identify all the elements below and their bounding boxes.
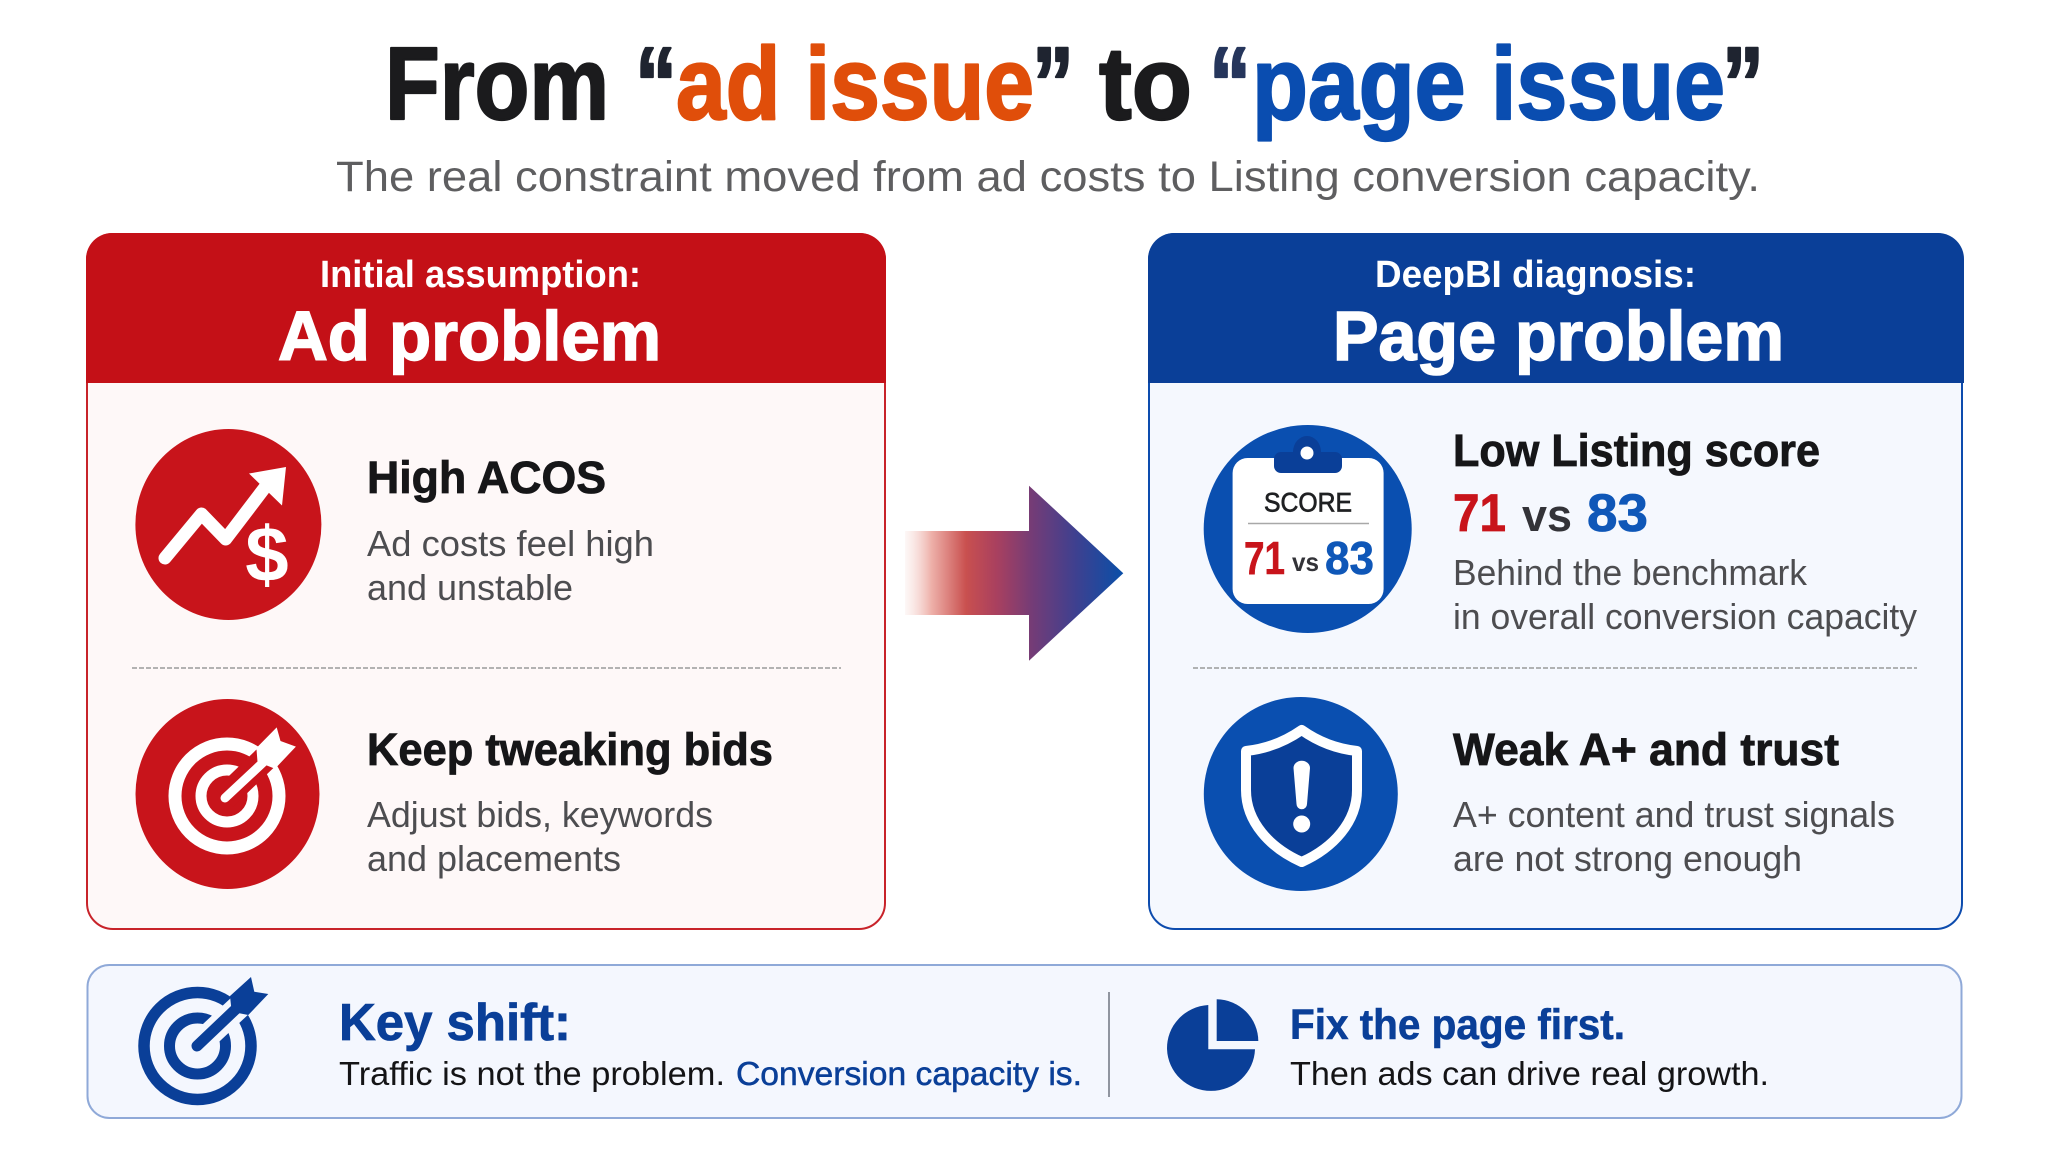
item: weak A+ and trust	[1453, 724, 1895, 879]
item: low listing score: in overall conversion capacity	[1453, 596, 1917, 637]
item: keep tweaking bids: and placements	[367, 838, 621, 879]
item: high ACOS: Ad costs feel high	[367, 523, 654, 564]
panel header: ad problem: Ad problem	[278, 297, 661, 375]
panel header: page problem: DeepBI diagnosis:	[1375, 254, 1696, 296]
icon: score clipboard: SCORE	[1264, 488, 1352, 518]
item: weak A+ and trust: A+ content and trust signals	[1453, 794, 1895, 835]
title: ad issue	[676, 26, 1034, 141]
item: high ACOS: High ACOS	[367, 452, 606, 503]
fix the page first text: Fix the page first.	[1290, 1001, 1625, 1049]
item: high ACOS: and unstable	[367, 567, 573, 608]
icon: rising cost chart with dollar	[135, 429, 321, 620]
key shift text: Key shift:	[339, 994, 571, 1052]
item: weak A+ and trust: are not strong enough	[1453, 838, 1802, 879]
icon: pie chart	[1167, 999, 1258, 1091]
arrow: from ad problem to page problem	[905, 486, 1123, 661]
panel header: ad problem: Initial assumption:	[320, 254, 641, 296]
key shift text: Traffic is not the problem.	[339, 1055, 725, 1092]
title: From	[385, 26, 609, 141]
item: weak A+ and trust: Weak A+ and trust	[1453, 724, 1839, 775]
key shift text: Conversion capacity is.	[736, 1055, 1082, 1092]
item: low listing score: vs	[1522, 490, 1572, 541]
title: “	[635, 26, 677, 141]
item: low listing score: 71	[1453, 484, 1506, 543]
item: high ACOS	[367, 452, 654, 608]
item: low listing score: Low Listing score	[1453, 425, 1820, 476]
item: keep tweaking bids	[367, 724, 773, 879]
title	[385, 26, 1764, 141]
item: low listing score: 83	[1587, 484, 1648, 543]
title: ”	[1032, 26, 1074, 141]
item: keep tweaking bids: Adjust bids, keywords	[367, 794, 713, 835]
item: keep tweaking bids: Keep tweaking bids	[367, 724, 773, 775]
icon: score clipboard: 71	[1244, 532, 1285, 584]
icon: rising cost chart with dollar: $	[245, 510, 289, 598]
fix the page first text: Then ads can drive real growth.	[1290, 1055, 1769, 1092]
key shift text	[339, 994, 1082, 1092]
title: page issue	[1252, 26, 1725, 141]
panel: initial assumption, ad problem	[86, 233, 886, 929]
icon: score clipboard: 83	[1325, 532, 1374, 584]
item: low listing score	[1453, 425, 1917, 637]
panel header: page problem: Page problem	[1333, 297, 1784, 375]
icon: score clipboard: vs	[1292, 547, 1319, 577]
title: ”	[1722, 26, 1764, 141]
icon: target with arrow	[136, 699, 320, 889]
item: low listing score: Behind the benchmark	[1453, 552, 1808, 593]
subtitle: The real constraint moved from ad costs to Listing conversion capacity.	[336, 153, 1760, 201]
panel header: page problem	[1148, 233, 1964, 383]
fix the page first text	[1290, 1001, 1769, 1092]
icon: shield with warning	[1204, 697, 1398, 891]
icon: bar target with arrow	[144, 977, 268, 1100]
icon: score clipboard	[1204, 425, 1412, 633]
panel header: ad problem	[86, 233, 886, 383]
title: “	[1209, 26, 1251, 141]
callout: key shift bar	[88, 965, 1962, 1118]
title: to	[1099, 26, 1192, 141]
panel: DeepBI diagnosis, page problem	[1148, 233, 1964, 929]
